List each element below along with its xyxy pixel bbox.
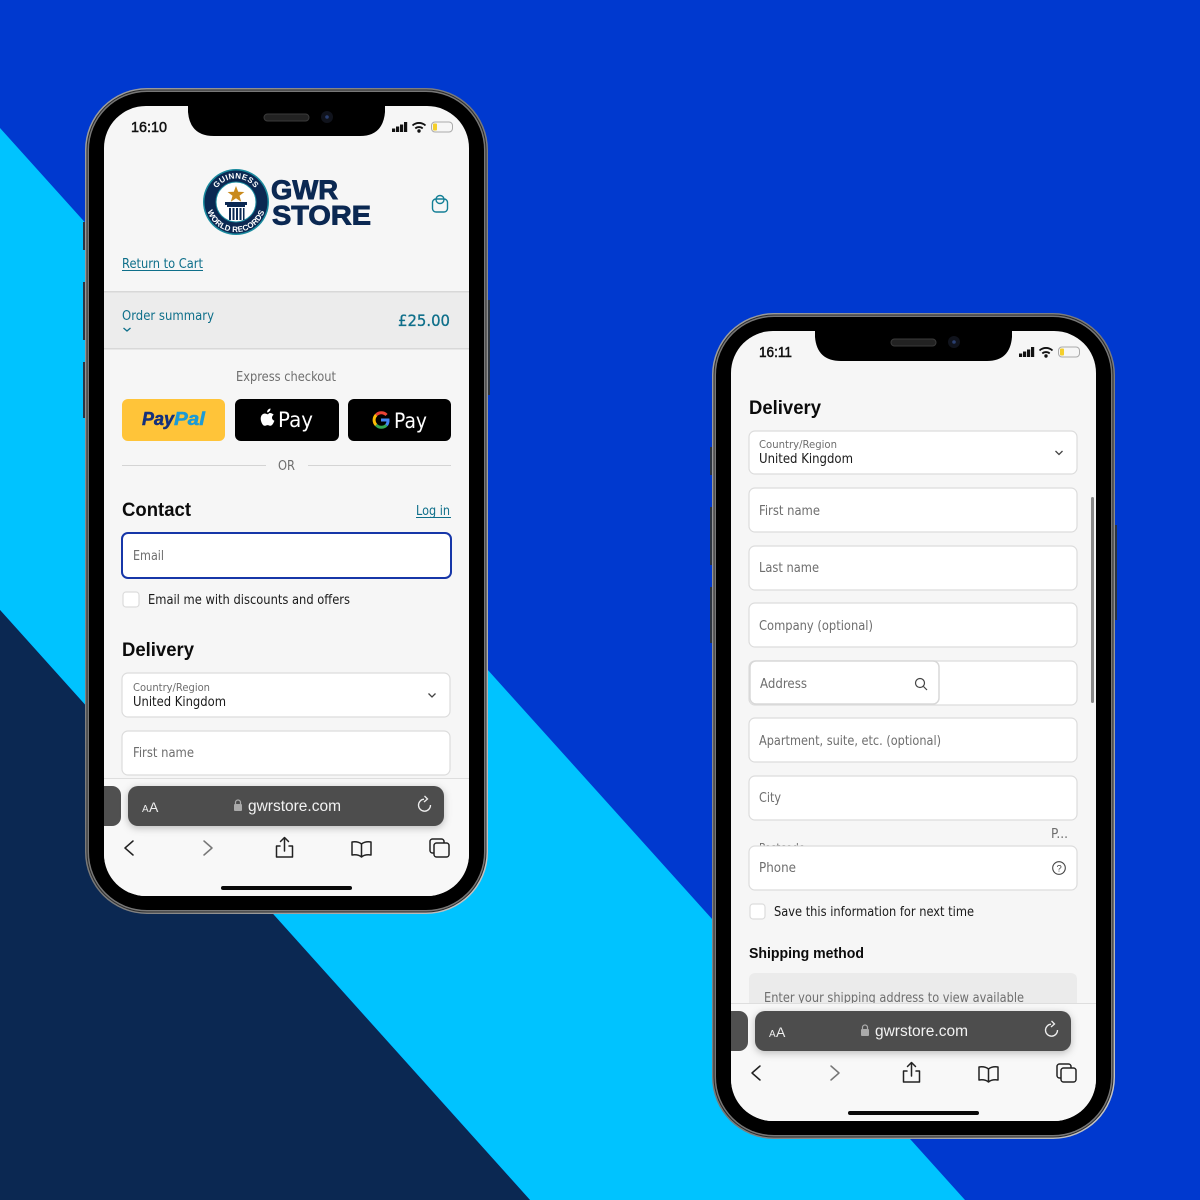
checkbox: email offers: Email me with discounts and offers	[148, 593, 350, 608]
scrollbar	[1091, 497, 1094, 703]
field: address	[749, 661, 1077, 705]
order summary band: £25.00	[398, 311, 450, 330]
button: Google Pay: Pay	[394, 409, 427, 433]
background: navy corner	[0, 610, 530, 1200]
status bar	[759, 345, 1080, 361]
text: truncated postcode label: Postcode	[759, 842, 805, 854]
field: address: Address	[760, 677, 807, 692]
field: email: Email	[133, 549, 164, 564]
logo wordmark: GWR	[271, 175, 338, 205]
screen background	[731, 329, 1096, 1122]
checkbox: save information: Save this information for next time	[774, 905, 974, 920]
field: city: City	[759, 791, 781, 806]
logo wordmark	[272, 180, 370, 226]
field: country: United Kingdom	[759, 452, 853, 467]
shipping notice	[749, 973, 1077, 1003]
field: country	[749, 431, 1077, 474]
field: first name: First name	[133, 746, 194, 761]
browser toolbar	[717, 1003, 1096, 1122]
field: phone: Phone	[759, 861, 796, 876]
logo: Guinness World Records	[203, 169, 269, 235]
heading: shipping method: Shipping method	[749, 946, 864, 962]
text: truncated postcode label: P...	[1051, 827, 1068, 842]
text: express checkout: Express checkout	[236, 370, 336, 385]
phone: left checkout screen	[83, 88, 490, 914]
notch	[188, 106, 385, 136]
link: log in: Log in	[416, 504, 450, 519]
phone frame	[83, 88, 490, 914]
browser toolbar: A	[149, 799, 159, 815]
browser toolbar: A	[776, 1024, 786, 1040]
field: email	[122, 533, 451, 578]
status bar	[132, 122, 453, 133]
notch	[815, 331, 1012, 361]
field: phone	[749, 846, 1077, 890]
field: company: Company (optional)	[759, 619, 873, 634]
field: company	[749, 603, 1077, 647]
field: apartment	[749, 718, 1077, 762]
button: PayPal: Pal	[174, 409, 206, 429]
browser toolbar: A	[769, 1029, 776, 1040]
logo: Guinness World Records: WORLD RECORDS	[208, 209, 264, 232]
field: apartment: Apartment, suite, etc. (optional)	[759, 734, 941, 749]
status bar: 16:10	[131, 120, 167, 136]
link: return to cart: Return to Cart	[122, 257, 203, 272]
browser toolbar: A	[142, 804, 149, 815]
browser toolbar: gwrstore.com	[248, 798, 341, 815]
field: country: United Kingdom	[133, 695, 226, 710]
shipping notice: Enter your shipping address to view available	[764, 991, 1024, 1006]
browser toolbar	[90, 778, 469, 897]
text: truncated postcode label	[760, 828, 1067, 846]
logo: Guinness World Records: GUINNESS	[214, 173, 258, 188]
screen background	[104, 104, 469, 897]
field: phone: ?	[1056, 864, 1062, 874]
field: country: Country/Region	[133, 682, 210, 694]
divider: OR: OR	[278, 459, 295, 474]
button: Apple Pay	[235, 399, 339, 441]
phone: right delivery screen	[710, 313, 1117, 1139]
phone frame	[710, 313, 1117, 1139]
field: last name	[749, 546, 1077, 590]
field: first name	[749, 488, 1077, 532]
field: city	[749, 776, 1077, 820]
field: first name	[122, 731, 450, 775]
heading: delivery: Delivery	[749, 398, 821, 419]
logo wordmark: STORE	[272, 200, 371, 230]
background: light blue diagonal band	[0, 128, 965, 1200]
icon: shopping bag	[432, 196, 448, 212]
field: first name: First name	[759, 504, 820, 519]
field: last name: Last name	[759, 561, 819, 576]
order summary band	[104, 291, 469, 350]
heading: delivery: Delivery	[122, 640, 194, 661]
button: Google Pay	[348, 399, 451, 441]
button: PayPal: Pay	[142, 409, 175, 429]
button: PayPal	[122, 399, 225, 441]
heading: contact: Contact	[122, 500, 192, 521]
status bar: 16:11	[759, 345, 792, 361]
field: country: Country/Region	[759, 439, 837, 451]
browser toolbar: gwrstore.com	[875, 1023, 968, 1040]
field: country	[122, 673, 450, 717]
button: Apple Pay: Pay	[278, 408, 313, 432]
order summary band: Order summary	[122, 309, 214, 324]
